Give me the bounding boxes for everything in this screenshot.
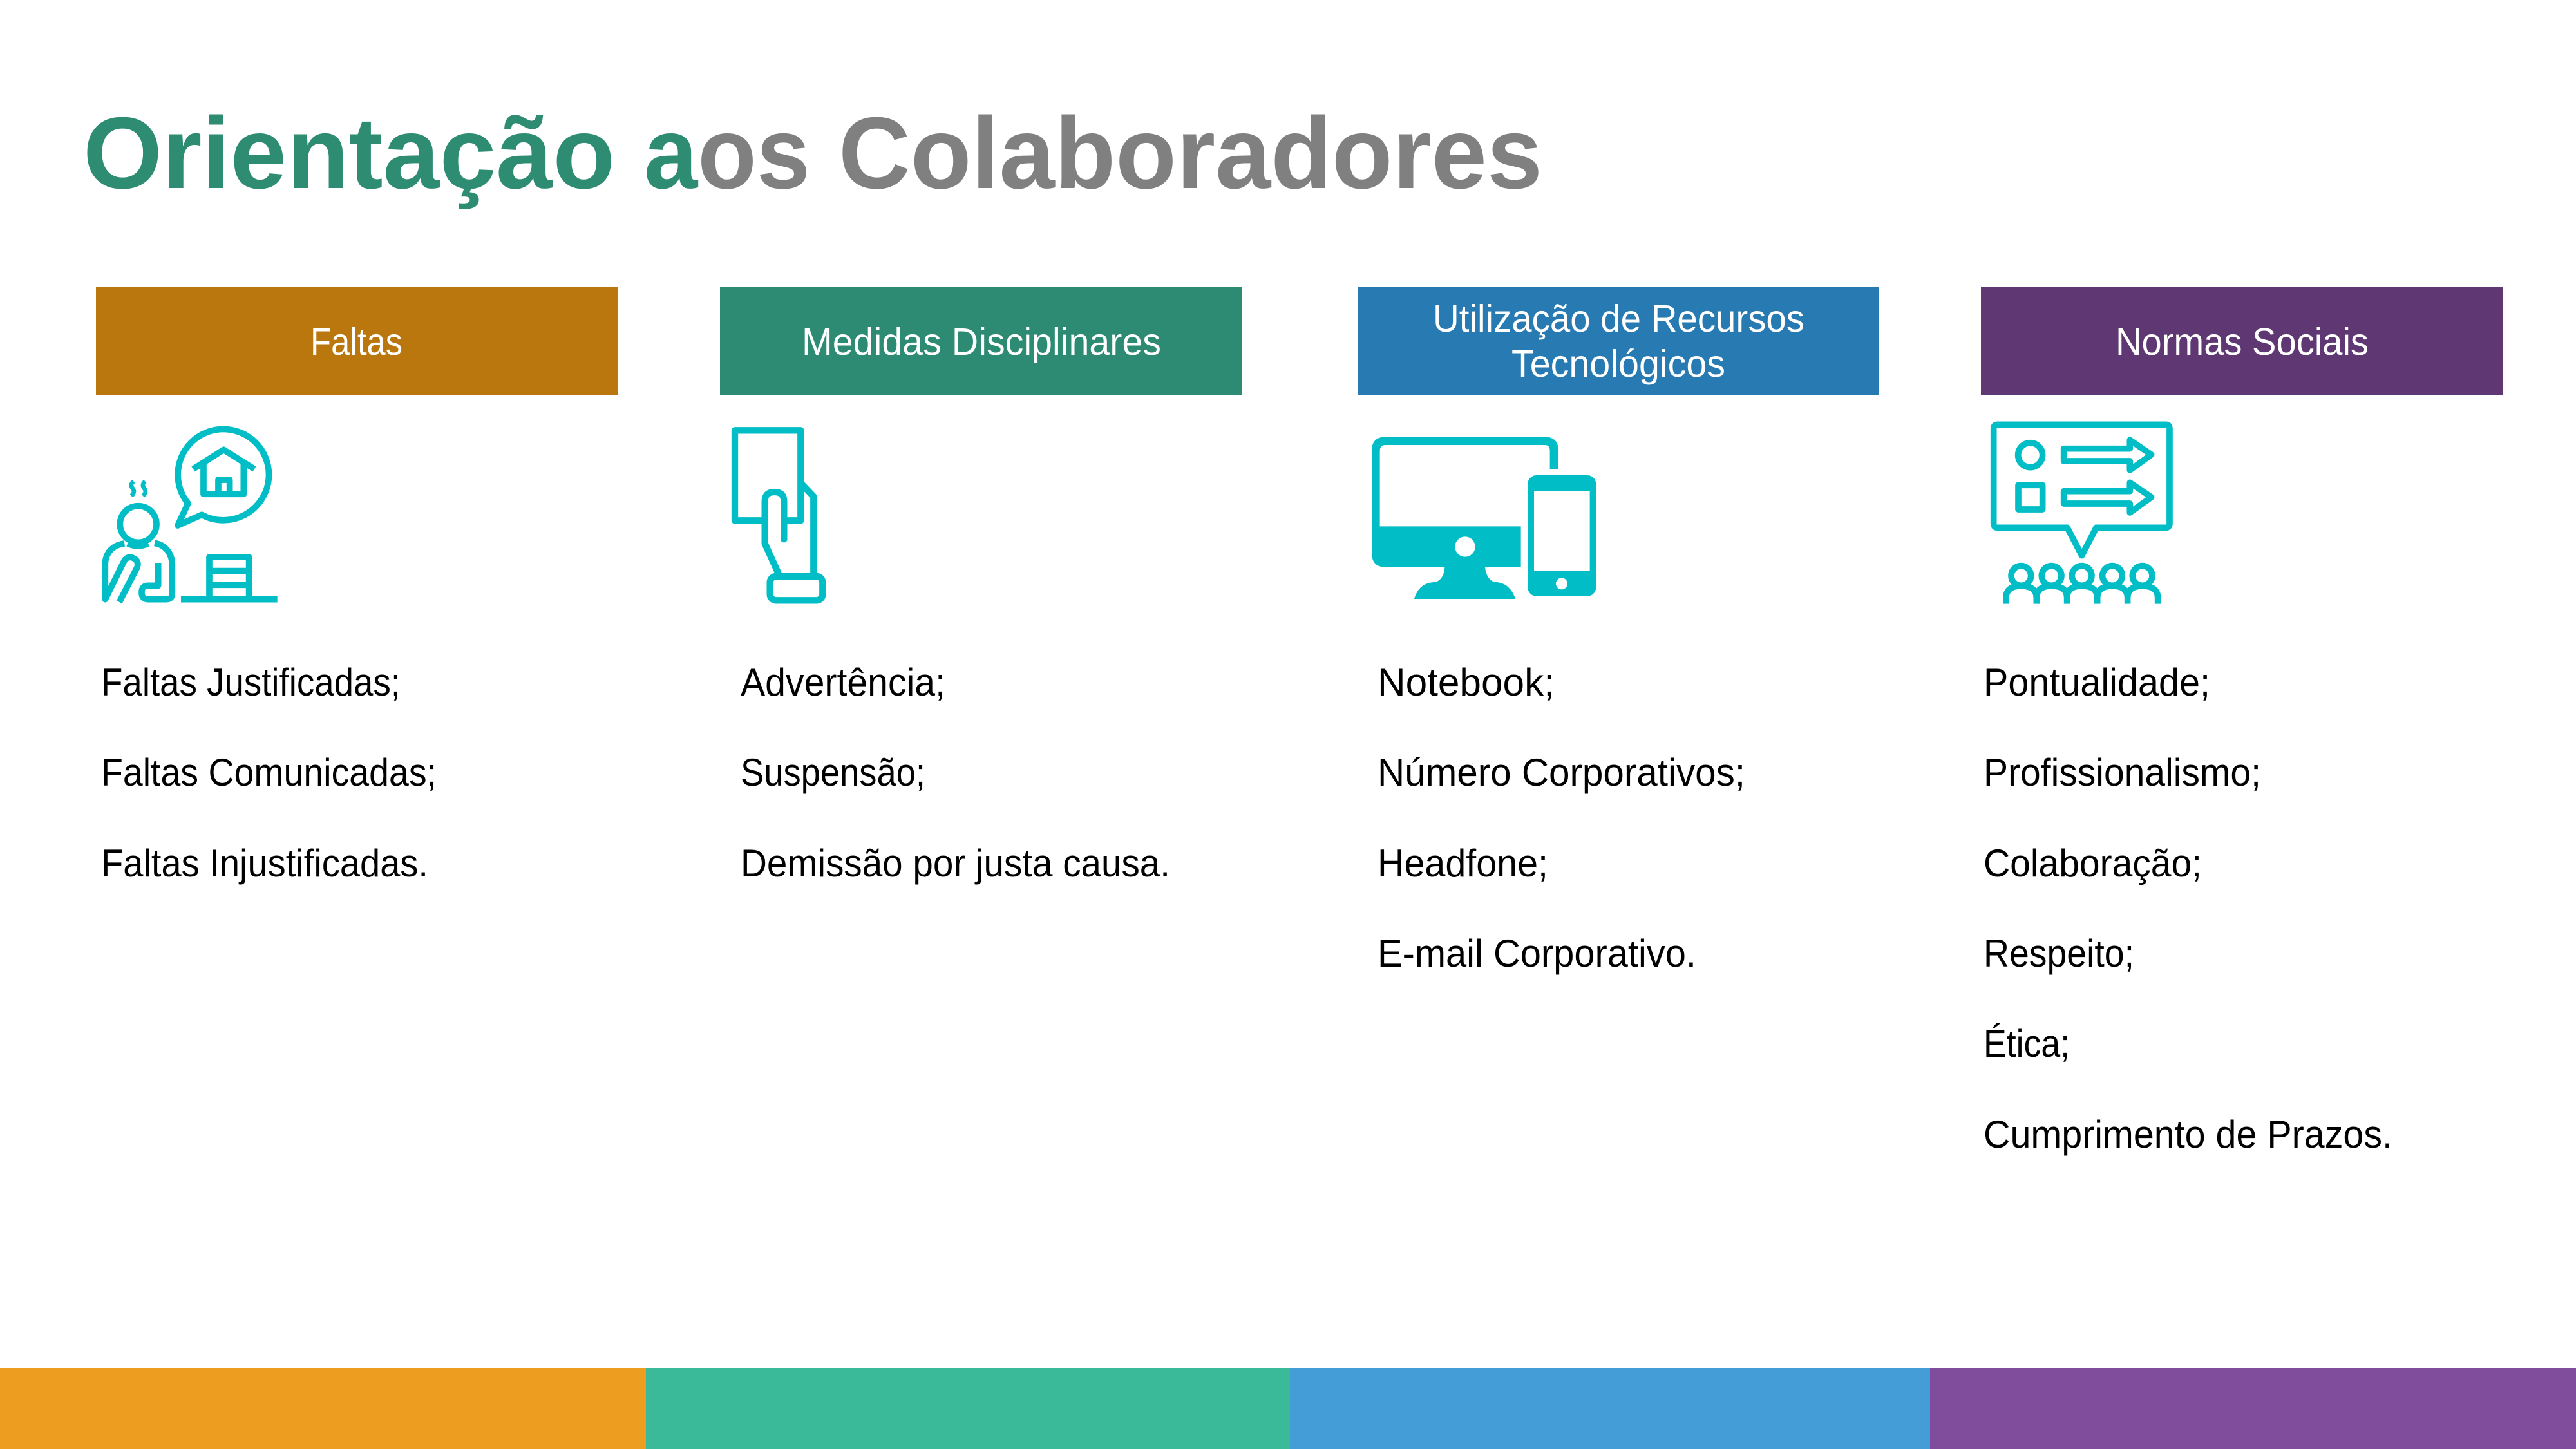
list: Medidas Disciplinares: [741, 661, 1170, 885]
icon: person thinking of home: [105, 429, 278, 602]
panel: Normas Sociais: [1981, 287, 2503, 1156]
list: Normas Sociais: Pontualidade;: [1984, 661, 2210, 704]
title: aos: [644, 97, 810, 210]
header: Utilização de Recursos Tecnológicos: Utilização de Recursos: [1433, 298, 1804, 340]
list: Normas Sociais: [1984, 661, 2392, 1156]
header: Normas Sociais: [1981, 287, 2503, 395]
header: Medidas Disciplinares: [720, 287, 1242, 395]
panel: Utilização de Recursos Tecnológicos: [1358, 287, 1879, 975]
title: [83, 97, 1542, 210]
list: Normas Sociais: Ética;: [1984, 1022, 2070, 1065]
list: Utilização de Recursos Tecnológicos: Notebook;: [1378, 661, 1555, 704]
panel: Faltas: [96, 287, 618, 885]
title: Orientação: [83, 97, 615, 210]
header: Medidas Disciplinares: Medidas Disciplinares: [802, 321, 1161, 363]
list: Medidas Disciplinares: Advertência;: [741, 661, 945, 704]
list: Utilização de Recursos Tecnológicos: Número Corporativos;: [1378, 751, 1745, 794]
list: Utilização de Recursos Tecnológicos: Headfone;: [1378, 842, 1548, 885]
list: Faltas: [101, 661, 437, 885]
list: Medidas Disciplinares: Suspensão;: [741, 751, 925, 794]
icon: hand holding card: [735, 430, 822, 600]
list: Faltas: Faltas Comunicadas;: [101, 751, 437, 794]
title: Colaboradores: [838, 97, 1542, 210]
list: Normas Sociais: Respeito;: [1984, 932, 2134, 975]
list: Faltas: Faltas Injustificadas.: [101, 842, 428, 885]
icon: speech bubble and audience: [1994, 424, 2170, 604]
header: Utilização de Recursos Tecnológicos: Tecnológicos: [1511, 343, 1725, 385]
list: Utilização de Recursos Tecnológicos: [1378, 661, 1745, 975]
header: Faltas: Faltas: [310, 321, 402, 363]
icon: monitor and phone: [1372, 437, 1596, 599]
list: Normas Sociais: Profissionalismo;: [1984, 751, 2261, 794]
panel: Medidas Disciplinares: [720, 287, 1242, 885]
header: Utilização de Recursos Tecnológicos: [1358, 287, 1879, 395]
list: Faltas: Faltas Justificadas;: [101, 661, 401, 704]
list: Normas Sociais: Colaboração;: [1984, 842, 2202, 885]
list: Utilização de Recursos Tecnológicos: E-mail Corporativo.: [1378, 932, 1696, 975]
header: Normas Sociais: Normas Sociais: [2116, 321, 2369, 363]
list: Normas Sociais: Cumprimento de Prazos.: [1984, 1113, 2392, 1156]
header: Faltas: [96, 287, 618, 395]
footer colour bar: [0, 1368, 2576, 1449]
list: Medidas Disciplinares: Demissão por justa causa.: [741, 842, 1170, 885]
